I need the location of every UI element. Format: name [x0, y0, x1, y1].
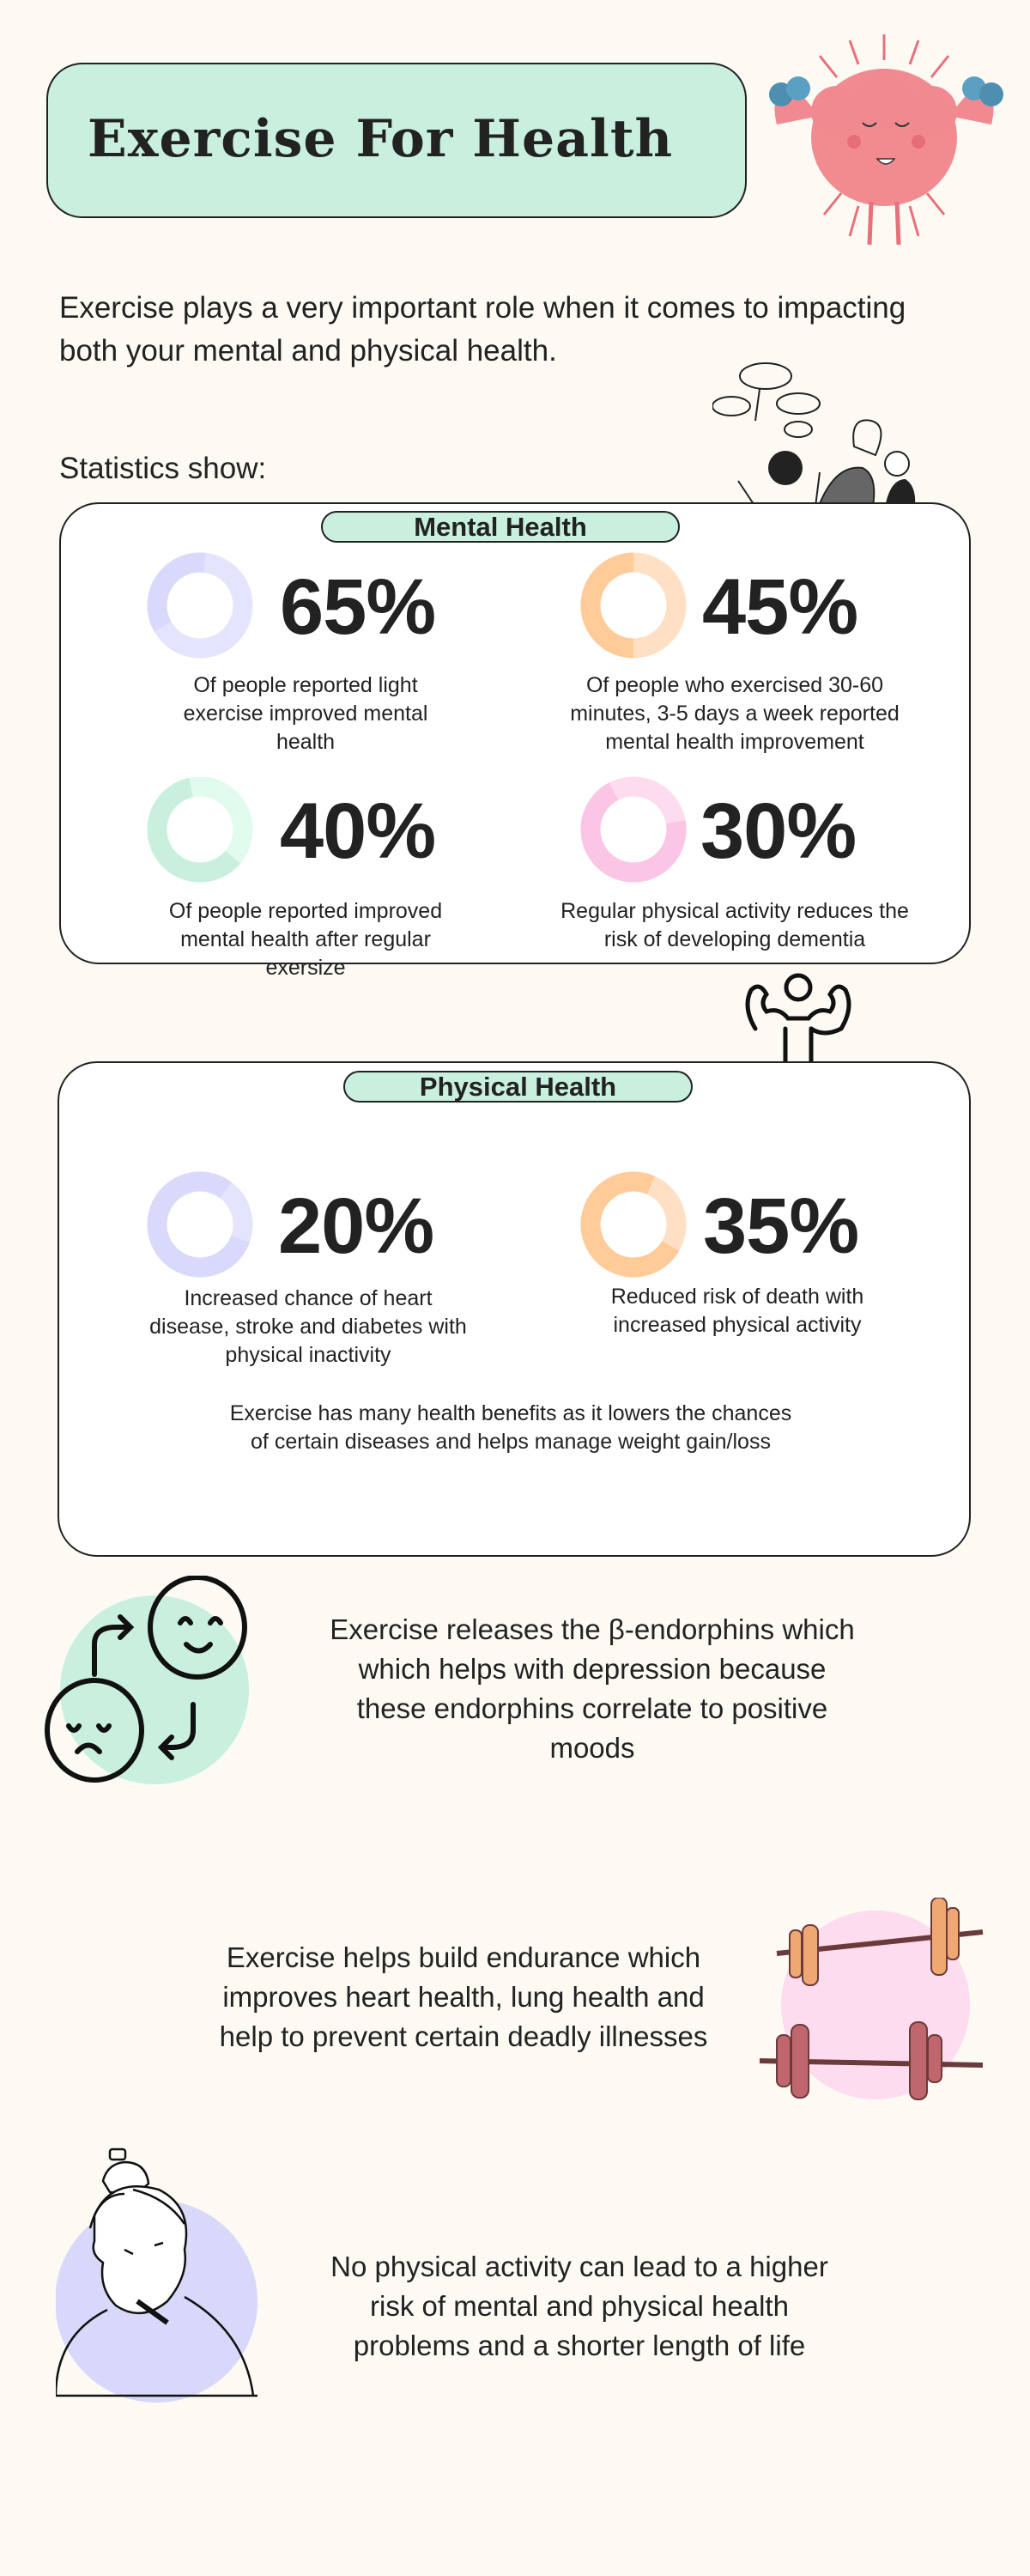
stat 65%: health [276, 730, 335, 754]
stat 30%: risk of developing dementia [604, 927, 865, 951]
statistics heading: Statistics show: [59, 452, 266, 485]
stat 35%: 35% [703, 1182, 858, 1270]
stat 30%: Regular physical activity reduces the [560, 899, 909, 923]
panel: physical health [58, 1061, 971, 1557]
text: inactivity risk: risk of mental and physical health [370, 2290, 789, 2322]
stat 40% [148, 776, 442, 980]
text: endorphins: these endorphins correlate to positive [357, 1692, 827, 1724]
stat 45%: 45% [702, 563, 857, 651]
text: exersize [265, 956, 346, 980]
icon: flexing brain [769, 34, 1003, 245]
illustration: people talking [712, 362, 915, 502]
intro text: both your mental and physical health. [59, 334, 557, 368]
stat 65% [148, 553, 435, 754]
stat 20%: Increased chance of heart [184, 1286, 433, 1310]
stat 45% [570, 553, 900, 754]
text: inactivity risk [330, 2251, 828, 2361]
text: endorphins [330, 1613, 855, 1764]
text: endorphins: Exercise releases the β-endorphins which [330, 1613, 855, 1645]
text: health benefits [230, 1401, 791, 1454]
text: endorphins: which helps with depression because [359, 1653, 826, 1685]
text: health benefits: of certain diseases and helps manage weight gain/loss [251, 1430, 771, 1454]
text: inactivity risk: problems and a shorter length of life [354, 2330, 805, 2361]
stat 30%: 30% [700, 787, 856, 875]
stat 45%: minutes, 3-5 days a week reported [570, 702, 900, 726]
stat 35%: Reduced risk of death with [611, 1285, 863, 1309]
stat 40%: 40% [280, 787, 435, 875]
stat 20%: physical inactivity [225, 1343, 391, 1367]
icon: dumbbells [759, 1898, 984, 2100]
text: endurance: Exercise helps build endurance which [227, 1941, 700, 1973]
stat 40%: Of people reported improved [169, 899, 442, 923]
stat 65%: exercise improved mental [184, 702, 427, 726]
intro text [59, 291, 906, 368]
stat 20%: 20% [278, 1182, 433, 1270]
stat 65%: Of people reported light [193, 673, 418, 697]
stat 45%: mental health improvement [605, 730, 864, 754]
stat 45%: Of people who exercised 30-60 [586, 673, 883, 697]
pill: mental health [321, 511, 680, 543]
text: inactivity risk: No physical activity can lead to a higher [330, 2251, 828, 2282]
title box [46, 63, 747, 218]
text: endorphins: moods [549, 1732, 635, 1764]
text: health benefits: Exercise has many health benefits as it lowers the chances [230, 1401, 791, 1425]
text: endurance: improves heart health, lung health and [222, 1981, 705, 2013]
stat 40%: mental health after regular [180, 927, 431, 951]
text: endurance: help to prevent certain deadly illnesses [220, 2020, 707, 2052]
stat 20% [148, 1171, 467, 1367]
intro text: Exercise plays a very important role when it comes to impacting [59, 291, 906, 325]
text: endurance [220, 1941, 707, 2052]
icon: sick person [56, 2148, 258, 2403]
stat 65%: 65% [280, 563, 435, 651]
stat 35%: increased physical activity [613, 1313, 862, 1337]
title: Exercise For Health [88, 109, 673, 169]
pill: mental health: Mental Health [414, 512, 587, 542]
panel: mental health [59, 502, 971, 964]
icon: muscle man [745, 974, 851, 1061]
stat 30% [560, 776, 909, 951]
icon: mood faces [45, 1576, 249, 1784]
pill: physical health [343, 1071, 693, 1103]
stat 20%: disease, stroke and diabetes with [149, 1315, 467, 1339]
stat 35% [580, 1171, 863, 1337]
pill: physical health: Physical Health [420, 1072, 616, 1102]
